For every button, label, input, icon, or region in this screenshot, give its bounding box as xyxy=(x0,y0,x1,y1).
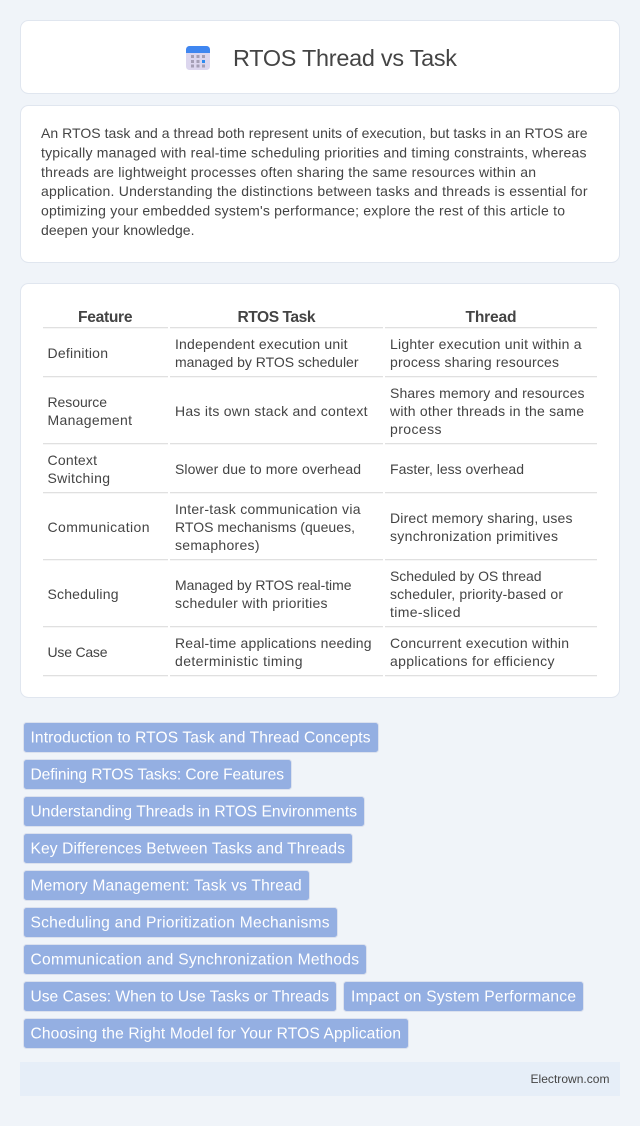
row: communication: Direct memory sharing, uses xyxy=(390,510,572,526)
row: communication: RTOS mechanisms (queues, xyxy=(175,519,355,535)
table header: Thread xyxy=(466,309,516,326)
tag xyxy=(24,870,310,900)
row: resource management: Has its own stack and context xyxy=(175,403,368,419)
row: definition: managed by RTOS scheduler xyxy=(175,354,359,370)
tag xyxy=(24,908,338,938)
footer xyxy=(20,1062,620,1096)
row: use case: deterministic timing xyxy=(175,653,302,669)
row: scheduling: scheduler with priorities xyxy=(175,595,328,611)
table header xyxy=(78,309,516,326)
row: resource management: Management xyxy=(48,412,132,428)
intro paragraph xyxy=(41,125,588,238)
tag: Defining RTOS Tasks: Core Features xyxy=(30,766,284,784)
row: context switching: Slower due to more overhead xyxy=(175,461,361,477)
intro text card xyxy=(20,106,620,262)
tag: Impact on System Performance xyxy=(351,988,576,1006)
tag xyxy=(24,982,336,1012)
row: resource management: process xyxy=(390,421,442,437)
row: use case: Concurrent execution within xyxy=(390,635,569,651)
row: scheduling: Scheduling xyxy=(48,586,118,602)
tag xyxy=(24,1018,408,1048)
row: communication: Communication xyxy=(48,519,150,535)
tag xyxy=(24,722,378,752)
row: resource management xyxy=(48,385,584,437)
footer source: Electrown.com xyxy=(530,1072,610,1086)
intro paragraph: threads are lightweight processes often sharing the same resources within an xyxy=(41,164,536,180)
intro paragraph: deepen your knowledge. xyxy=(41,222,194,238)
tag: Key Differences Between Tasks and Threads xyxy=(30,840,345,858)
intro paragraph: typically managed with real-time scheduling priorities and timing constraints, whereas xyxy=(41,144,586,160)
intro paragraph: optimizing your embedded system's performance; explore the rest of this article to xyxy=(41,203,565,219)
tag xyxy=(24,944,366,974)
row: resource management: with other threads in the same xyxy=(389,403,584,419)
table header: Feature xyxy=(78,309,133,326)
row: communication: semaphores) xyxy=(175,537,260,553)
row: communication: Inter-task communication via xyxy=(175,501,361,517)
row: definition: Independent execution unit xyxy=(175,336,348,352)
tag: Communication and Synchronization Methods xyxy=(30,952,359,968)
row: use case: applications for efficiency xyxy=(390,653,554,669)
row: definition xyxy=(48,336,582,370)
tag: Introduction to RTOS Task and Thread Concepts xyxy=(30,730,371,746)
topic tags xyxy=(24,722,584,1048)
row: use case: Real-time applications needing xyxy=(175,635,372,651)
tag xyxy=(24,796,364,826)
tag xyxy=(24,760,292,790)
tag: Choosing the Right Model for Your RTOS Application xyxy=(30,1026,401,1042)
row: scheduling: Managed by RTOS real-time xyxy=(175,577,352,593)
row: context switching: Switching xyxy=(48,470,110,486)
row: use case xyxy=(48,635,569,669)
row: definition: Lighter execution unit within a xyxy=(390,336,582,352)
tag xyxy=(344,982,584,1012)
row: use case: Use Case xyxy=(48,644,108,660)
row: context switching xyxy=(48,452,524,486)
row: scheduling: time-sliced xyxy=(390,604,460,620)
icon: calendar xyxy=(186,46,210,70)
tag: Understanding Threads in RTOS Environments xyxy=(30,804,357,820)
tag xyxy=(24,834,352,864)
row: communication xyxy=(48,501,572,553)
comparison table card xyxy=(20,284,620,698)
row: scheduling: Scheduled by OS thread xyxy=(390,568,542,584)
table header: RTOS Task xyxy=(238,309,316,326)
row: resource management: Resource xyxy=(48,394,107,410)
tag: Use Cases: When to Use Tasks or Threads xyxy=(30,988,329,1006)
tag: Scheduling and Prioritization Mechanisms xyxy=(30,914,330,932)
row: definition: process sharing resources xyxy=(390,354,559,370)
row: definition: Definition xyxy=(48,345,108,361)
row: scheduling: scheduler, priority-based or xyxy=(390,586,563,602)
row: context switching: Context xyxy=(48,452,97,468)
row: resource management: Shares memory and resources xyxy=(390,385,584,401)
row: scheduling xyxy=(48,568,563,620)
intro paragraph: application. Understanding the distinctions between tasks and threads is essential for xyxy=(41,183,588,199)
title: RTOS Thread vs Task xyxy=(233,45,457,71)
intro paragraph: An RTOS task and a thread both represent units of execution, but tasks in an RTOS are xyxy=(41,125,588,141)
tag: Memory Management: Task vs Thread xyxy=(30,878,302,894)
header card xyxy=(20,20,620,94)
row: context switching: Faster, less overhead xyxy=(390,461,524,477)
row: communication: synchronization primitives xyxy=(390,528,558,544)
